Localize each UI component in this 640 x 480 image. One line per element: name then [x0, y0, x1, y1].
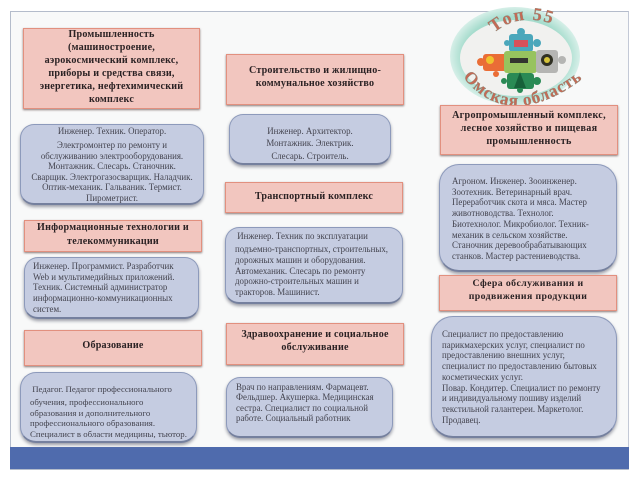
text block: transport professions: дорожных машин и оборудования.	[235, 255, 365, 265]
text block: transport professions: подъемно-транспортных, строительных,	[235, 244, 388, 254]
text block: transport professions: Автомеханик. Слесарь по ремонту	[235, 266, 365, 276]
text block: industry professions: Монтажник. Слесарь. Станочник.	[48, 161, 176, 171]
curved subtitle: Омская область	[465, 72, 582, 105]
heading: agro-industry: промышленность	[486, 136, 572, 147]
text block: agro professions: животноводства. Технолог.	[452, 208, 554, 218]
text block: industry professions: Пирометрист.	[86, 193, 138, 203]
text block: services professions: специалист по предоставлению бытовых	[442, 361, 597, 371]
text block: services professions: текстильной галантереи. Маркетолог.	[442, 404, 583, 414]
heading: services: продвижения продукции	[469, 291, 587, 302]
text block: services professions: предоставлению внешних услуг,	[442, 350, 565, 360]
heading: construction	[226, 54, 404, 105]
heading: industry: аэрокосмический комплекс,	[45, 55, 178, 66]
text block: agro professions	[439, 164, 617, 272]
text block: IT professions	[24, 257, 199, 319]
text block: industry professions: обслуживанию электрооборудования.	[41, 151, 183, 161]
text block: construction professions: Монтажник. Электрик.	[266, 138, 354, 148]
heading: transport	[225, 182, 403, 213]
logo: Top 55 Omsk region puzzle	[450, 7, 582, 105]
text block: services professions: Повар. Кондитер. Специалист по ремонту	[442, 383, 600, 393]
heading: industry: энергетика, нефтехимический	[40, 81, 183, 92]
text block: IT professions: Инженер. Программист. Разработчик	[33, 261, 174, 271]
text block: industry professions: Оптик-механик. Гальваник. Термист.	[42, 182, 182, 192]
text block: services professions: Продавец.	[442, 415, 481, 425]
text block: transport professions: тракторов. Машинист.	[235, 287, 320, 297]
text block: education professions: Специалист в области медицины, тьютор.	[30, 429, 187, 439]
heading: transport: Транспортный комплекс	[255, 191, 373, 202]
heading: industry	[23, 28, 200, 109]
heading: industry: (машиностроение,	[68, 42, 155, 53]
text block: education professions: образования и дополнительного	[30, 408, 150, 418]
text block: IT professions: систем.	[33, 304, 61, 314]
heading: services: Сфера обслуживания и	[472, 278, 584, 289]
heading: healthcare: Здравоохранение и социальное	[241, 329, 389, 340]
text block: construction professions: Инженер. Архитектор.	[267, 126, 353, 136]
text block: IT professions: Web и мультимедийных приложений.	[33, 272, 174, 282]
text block: services professions: косметических услуг.	[442, 372, 523, 382]
text block: services professions: Специалист по предоставлению	[442, 329, 563, 339]
text block: agro professions: механик в сельском хозяйстве.	[452, 230, 568, 240]
heading: information technology	[24, 220, 202, 252]
text block: healthcare professions: Врач по направлениям. Фармацевт.	[236, 382, 369, 392]
text block: services professions	[431, 316, 617, 438]
text block: agro professions: станков. Мастер растениеводства.	[452, 251, 580, 261]
text block: agro professions: Агроном. Инженер. Зооинженер.	[452, 176, 577, 186]
text block: services professions: и индивидуальному пошиву изделий	[442, 393, 581, 403]
text block: healthcare professions: работе. Социальный работник	[236, 413, 350, 423]
text block: construction professions	[229, 114, 391, 165]
text block: IT professions: Техник. Системный администратор	[33, 282, 167, 292]
heading: healthcare	[226, 323, 404, 365]
heading: information technology: телекоммуникации	[67, 236, 159, 247]
text block: transport professions	[225, 227, 403, 304]
heading: agro-industry: лесное хозяйство и пищевая	[461, 123, 597, 134]
text block: transport professions: Инженер. Техник по эксплуатации	[237, 231, 368, 241]
text block: agro professions: Биотехнолог. Микробиолог. Техник-	[452, 219, 589, 229]
text block: industry professions: Сварщик. Электрогазосварщик. Наладчик.	[31, 172, 193, 182]
heading: construction: коммунальное хозяйство	[256, 78, 374, 89]
text block: education professions: Педагог. Педагог профессионального	[32, 384, 172, 394]
heading: education	[24, 330, 202, 366]
heading: agro-industry	[440, 105, 618, 155]
text block: transport professions: дорожно-строительных машин и	[235, 276, 359, 286]
text block: agro professions: Станочник деревообрабатывающих	[452, 240, 587, 250]
text block: industry professions: Инженер. Техник. Оператор.	[58, 126, 166, 136]
text block: healthcare professions	[226, 377, 393, 438]
text block: industry professions	[20, 124, 204, 205]
text block: education professions: обучения, профессионального	[30, 397, 143, 407]
text block: construction professions: Слесарь. Строитель.	[271, 151, 349, 161]
heading: agro-industry: Агропромышленный комплекс,	[452, 110, 606, 121]
text block: healthcare professions: Фельдшер. Акушерка. Медицинская	[236, 392, 374, 402]
heading: services	[439, 275, 617, 311]
text block: agro professions: Зоотехник. Ветеринарный врач.	[452, 187, 572, 197]
puzzle pieces	[477, 28, 566, 93]
heading: information technology: Информационные технологии и	[37, 222, 189, 233]
heading: education: Образование	[82, 340, 144, 351]
heading: industry: приборы и средства связи,	[48, 68, 175, 79]
heading: industry: комплекс	[89, 94, 134, 105]
text block: services professions: парикмахерских услуг, специалист по	[442, 340, 585, 350]
heading: industry: Промышленность	[68, 29, 154, 40]
text block: agro professions: Переработчик скота и мяса. Мастер	[452, 197, 587, 207]
text block: education professions: профессионального образования.	[30, 418, 155, 428]
heading: healthcare: обслуживание	[281, 342, 349, 353]
text block: IT professions: информационно-коммуникационных	[33, 293, 173, 303]
text block: education professions	[20, 372, 197, 443]
heading: construction: Строительство и жилищно-	[249, 65, 381, 76]
text block: healthcare professions: сестра. Специалист по социальной	[236, 403, 368, 413]
text block: industry professions: Электромонтер по ремонту и	[57, 140, 167, 150]
